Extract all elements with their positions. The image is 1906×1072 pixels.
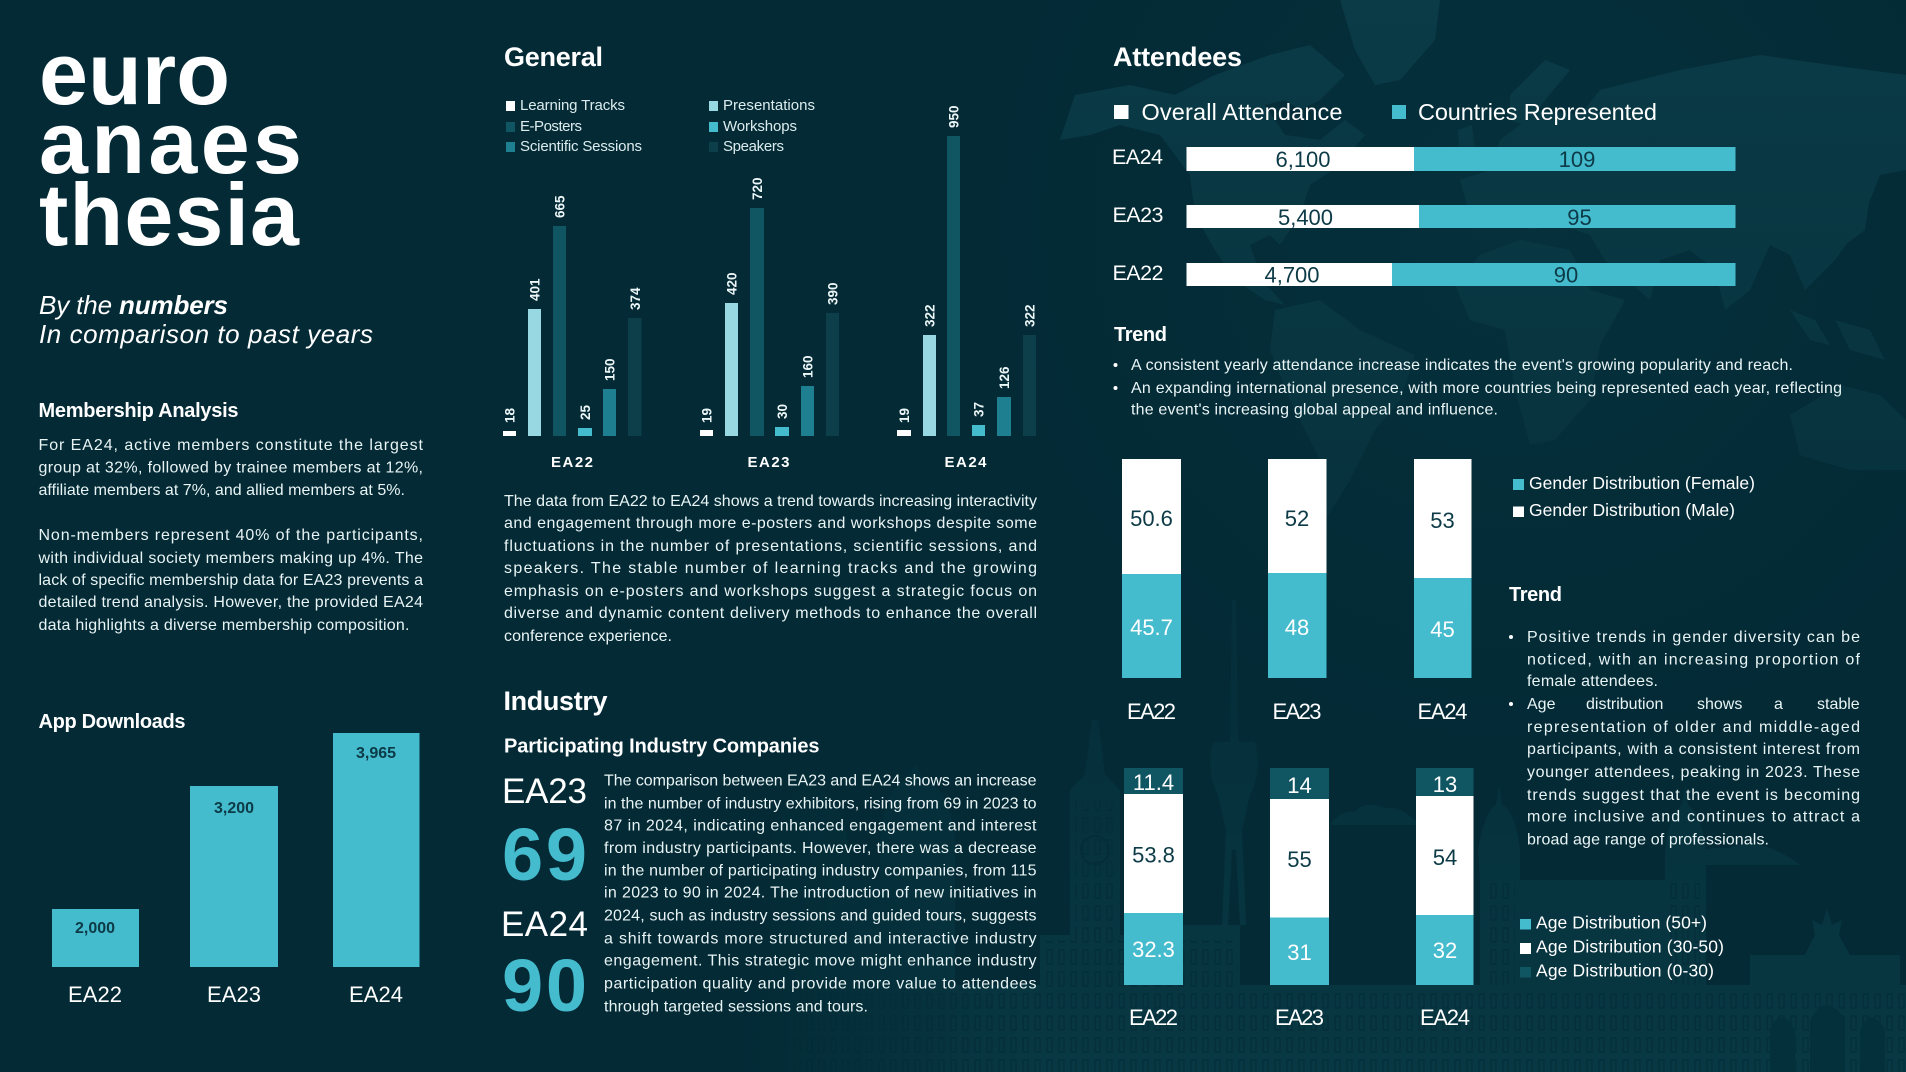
legend: age: Age Distribution (0-30) [1536, 960, 1714, 980]
text block: membership: data highlights a diverse membership composition. [38, 617, 410, 634]
text block: membership: lack of specific membership data for EA23 prevents a [38, 572, 423, 589]
skyline: clouds [1330, 805, 1800, 865]
skyline: low buildings band [740, 985, 1906, 1072]
text block: demographic trend: distribution [1586, 696, 1663, 713]
bar chart: app downloads: 2,000 [75, 920, 115, 937]
text block: membership: Non-members represent 40% of the participants, [38, 527, 423, 544]
skyline: twin church towers [1478, 785, 1706, 1072]
bar chart: EA22: 25 [578, 404, 593, 420]
heading: attendees: Attendees [1113, 42, 1242, 72]
background: world map [1060, 0, 1906, 520]
title: anaes [39, 93, 302, 192]
bar chart: EA22: 665 [552, 195, 568, 218]
skyline: arch gate [1750, 908, 1900, 1072]
bar chart: EA22: 374 [628, 287, 643, 310]
chart: age distribution: 32.3 [1132, 937, 1175, 962]
bar chart: EA23: 30 [775, 404, 790, 419]
skyline: parliament block [1040, 925, 1240, 1072]
bar: EA23 attendance: 95 [1567, 205, 1592, 230]
bar: EA23 attendance [1112, 203, 1736, 230]
panel: membership analysis [38, 400, 424, 634]
legend: attendance: Overall Attendance [1142, 99, 1342, 125]
chart: age distribution: 53.8 [1132, 842, 1175, 868]
text block: demographic trend: a [1774, 696, 1783, 713]
bar chart: app downloads: 3,200 [214, 800, 254, 817]
chart: gender distribution: EA24 [1418, 699, 1468, 724]
background: city skyline [740, 600, 1906, 1072]
chart: age distribution: EA24 [1420, 1005, 1470, 1030]
text block: membership [38, 437, 424, 634]
chart: age distribution: 54 [1433, 845, 1457, 870]
text block: industry: engagement. This strategic move might enhance industry [604, 952, 1036, 970]
bar: EA24 attendance: EA24 [1112, 145, 1163, 169]
heading: industry: Industry [504, 686, 608, 716]
text block: membership: For EA24, active members constitute the largest [38, 437, 424, 454]
bar chart: EA24: 37 [972, 402, 986, 417]
panel: demographic trend [1509, 584, 1861, 848]
text block: attendance trend [1114, 357, 1842, 418]
text block: industry: in the number of industry exhibitors, rising from 69 in 2023 to [604, 796, 1037, 812]
bar chart: EA23: EA23 [748, 454, 790, 471]
text block: demographic trend: participants, with a consistent interest from [1527, 741, 1860, 758]
legend: general: Presentations [723, 97, 815, 114]
title: euro [39, 24, 230, 123]
title [39, 24, 302, 264]
legend: general: Speakers [723, 138, 784, 155]
bar: EA24 attendance: 109 [1559, 147, 1595, 172]
chart: age distribution: 13 [1433, 772, 1457, 797]
bar chart: EA22: 18 [502, 407, 518, 423]
legend: age: Age Distribution (30-50) [1536, 936, 1724, 956]
bar: EA23 attendance: EA23 [1112, 203, 1164, 227]
skyline: TV tower [1210, 600, 1258, 925]
bar chart: app downloads: EA23 [207, 982, 261, 1007]
skyline: left fade [740, 740, 1040, 1072]
bar chart: EA23: 19 [700, 408, 714, 423]
panel: app downloads [38, 711, 420, 1007]
bar chart: EA24: 950 [946, 105, 962, 128]
chart: age distribution: 11.4 [1133, 770, 1174, 795]
text block: general: emphasis on e-posters and workshops suggest a strategic focus on [504, 583, 1037, 600]
text block: demographic trend [1509, 629, 1861, 848]
text block: industry: in the number of participating industry companies, from 115 [604, 862, 1037, 880]
chart: gender distribution: 53 [1430, 508, 1455, 533]
skyline: left domes [770, 765, 955, 1072]
text block: general: speakers. The stable number of learning tracks and the growing [504, 560, 1037, 577]
legend: attendance [1114, 99, 1657, 125]
text block: demographic trend: representation of older and middle-aged [1527, 719, 1860, 736]
bar chart: EA24: 19 [897, 408, 912, 423]
text block: general: conference experience. [504, 628, 672, 645]
chart: age distribution: EA22 [1129, 1005, 1178, 1030]
chart: age distribution: 55 [1287, 847, 1312, 872]
chart: gender distribution: 45 [1430, 617, 1455, 642]
chart: age distribution: 14 [1287, 773, 1312, 798]
legend: gender [1513, 473, 1755, 520]
text block: industry: through targeted sessions and tours. [604, 998, 868, 1016]
text block: industry: 2024, such as industry sessions and guided tours, suggests [604, 908, 1036, 924]
bar chart: EA24: EA24 [944, 454, 987, 471]
bar chart: EA24: 126 [997, 366, 1012, 389]
text block: general: The data from EA22 to EA24 shows a trend towards increasing interactivity [504, 493, 1037, 510]
text block: general: and engagement through more e-posters and workshops despite some [504, 515, 1037, 532]
text block: demographic trend: Age [1527, 696, 1556, 713]
legend: general [506, 97, 815, 155]
text block: membership: affiliate members at 7%, and allied members at 5%. [38, 482, 405, 499]
legend: gender: Gender Distribution (Female) [1529, 473, 1755, 493]
legend: age: Age Distribution (50+) [1536, 912, 1707, 932]
chart: gender distribution: 48 [1285, 615, 1309, 640]
bar chart: EA23 [700, 177, 840, 471]
bar chart: EA24: 322 [922, 304, 938, 327]
stat: EA23 69 [502, 772, 587, 896]
heading: general: General [504, 42, 603, 72]
subheading: participating industry companies: Participating Industry Companies [504, 736, 820, 758]
text block: industry: a shift towards more structured and interactive industry [604, 930, 1036, 948]
text block: industry: participation quality and provide more value to attendees [604, 976, 1036, 992]
text block: demographic trend: shows [1697, 696, 1742, 713]
text block: industry: 87 in 2024, indicating enhanced engagement and interest [604, 818, 1037, 834]
stat: EA23 69: 69 [502, 813, 587, 896]
background glow [1000, 0, 1906, 780]
chart: age distribution: 31 [1287, 940, 1312, 965]
skyline: window texture [740, 990, 1906, 1072]
text block: general [504, 493, 1037, 645]
heading: demographic trend: Trend [1509, 584, 1562, 606]
chart: gender distribution: EA23 [1272, 699, 1322, 724]
text block: demographic trend: more inclusive and continues to attract a [1527, 808, 1860, 826]
text block: industry: in 2023 to 90 in 2024. The introduction of new initiatives in [604, 884, 1036, 902]
text block: demographic trend: broad age range of professionals. [1527, 832, 1769, 848]
skyline: clock face [1081, 836, 1109, 864]
chart: age distribution: 32 [1433, 938, 1457, 963]
text block: industry: The comparison between EA23 and EA24 shows an increase [604, 772, 1037, 790]
title: thesia [39, 165, 300, 264]
panel: attendees [1112, 42, 1842, 418]
bar: EA22 attendance [1112, 261, 1736, 288]
bar chart: EA23: 390 [826, 282, 840, 305]
stat: EA23 69: EA23 [502, 772, 587, 811]
panel: general [502, 42, 1038, 645]
skyline: clock tower [1070, 720, 1120, 1000]
bar chart: EA22: EA22 [551, 454, 593, 471]
chart: age distribution [1124, 768, 1474, 1030]
bar chart: EA23: 420 [724, 272, 740, 295]
bar chart: app downloads: EA24 [349, 982, 403, 1007]
bar: EA22 attendance: 4,700 [1264, 262, 1320, 288]
stat: EA24 90 [501, 905, 588, 1027]
text block: general: fluctuations in the number of presentations, scientific sessions, and [504, 538, 1037, 555]
bar chart: EA23: 160 [800, 355, 816, 378]
bar chart: app downloads: EA22 [68, 982, 122, 1007]
legend: general: Scientific Sessions [520, 138, 642, 155]
text block: demographic trend: younger attendees, peaking in 2023. These [1527, 764, 1860, 781]
stat: EA24 90: 90 [502, 944, 587, 1027]
chart: gender distribution: 50.6 [1130, 506, 1173, 531]
bar chart: EA22: 150 [602, 358, 618, 381]
text block: industry [604, 772, 1037, 1016]
bar chart: EA24: 322 [1022, 304, 1038, 327]
text block: demographic trend: Positive trends in gender diversity can be [1527, 629, 1860, 646]
bar chart: EA23: 720 [750, 177, 765, 200]
bar chart: app downloads: 3,965 [356, 745, 396, 762]
text block: attendance trend: A consistent yearly attendance increase indicates the event's growing popularity and reach. [1131, 357, 1793, 374]
heading: attendance trend: Trend [1114, 324, 1167, 346]
chart: age distribution: EA23 [1275, 1005, 1324, 1030]
skyline: gate arches [1770, 1005, 1885, 1072]
heading: membership analysis: Membership Analysis [38, 400, 238, 422]
text block: demographic trend: trends suggest that the event is becoming [1527, 787, 1860, 804]
subtitle: By the numbers [39, 290, 228, 320]
subtitle [39, 290, 373, 349]
panel: industry [501, 686, 1037, 1027]
text block: industry: from industry participants. However, there was a decrease [604, 840, 1037, 857]
legend: general: Learning Tracks [520, 97, 625, 114]
chart: gender distribution [1122, 459, 1472, 724]
bar chart: EA24 [897, 105, 1038, 471]
legend: general: Workshops [723, 118, 797, 135]
text block: membership: group at 32%, followed by trainee members at 12%, [38, 460, 423, 476]
text block: membership: detailed trend analysis. However, the provided EA24 [38, 594, 423, 611]
legend: general: E-Posters [520, 118, 582, 135]
bar chart: EA22: 401 [528, 278, 542, 301]
legend: age [1520, 912, 1724, 980]
text block: demographic trend: noticed, with an increasing proportion of [1527, 652, 1861, 668]
text block: demographic trend: female attendees. [1527, 673, 1658, 690]
legend: attendance: Countries Represented [1418, 99, 1657, 125]
text block: membership: with individual society members making up 4%. The [38, 550, 423, 567]
text block: demographic trend: stable [1817, 696, 1860, 713]
heading: app downloads: App Downloads [38, 711, 186, 733]
text block: attendance trend: An expanding international presence, with more countries being represented each year, reflecting [1131, 380, 1842, 397]
chart: gender distribution: EA22 [1127, 699, 1176, 724]
bar: EA22 attendance: 90 [1554, 262, 1578, 288]
text block: attendance trend: the event's increasing global appeal and influence. [1131, 402, 1498, 418]
bar chart: app downloads [52, 733, 420, 1007]
bar: EA23 attendance: 5,400 [1278, 205, 1333, 230]
bar chart: EA22 [502, 195, 643, 471]
stat: EA24 90: EA24 [501, 905, 588, 944]
chart: gender distribution: 45.7 [1130, 615, 1173, 640]
text block: general: diverse and dynamic content delivery methods to enhance the overall [504, 605, 1037, 622]
chart: gender distribution: 52 [1285, 506, 1309, 531]
legend: gender: Gender Distribution (Male) [1529, 500, 1735, 520]
subtitle: In comparison to past years [39, 319, 373, 349]
bar: EA24 attendance: 6,100 [1275, 147, 1331, 172]
bar: EA22 attendance: EA22 [1112, 261, 1164, 285]
bar: EA24 attendance [1112, 145, 1736, 172]
